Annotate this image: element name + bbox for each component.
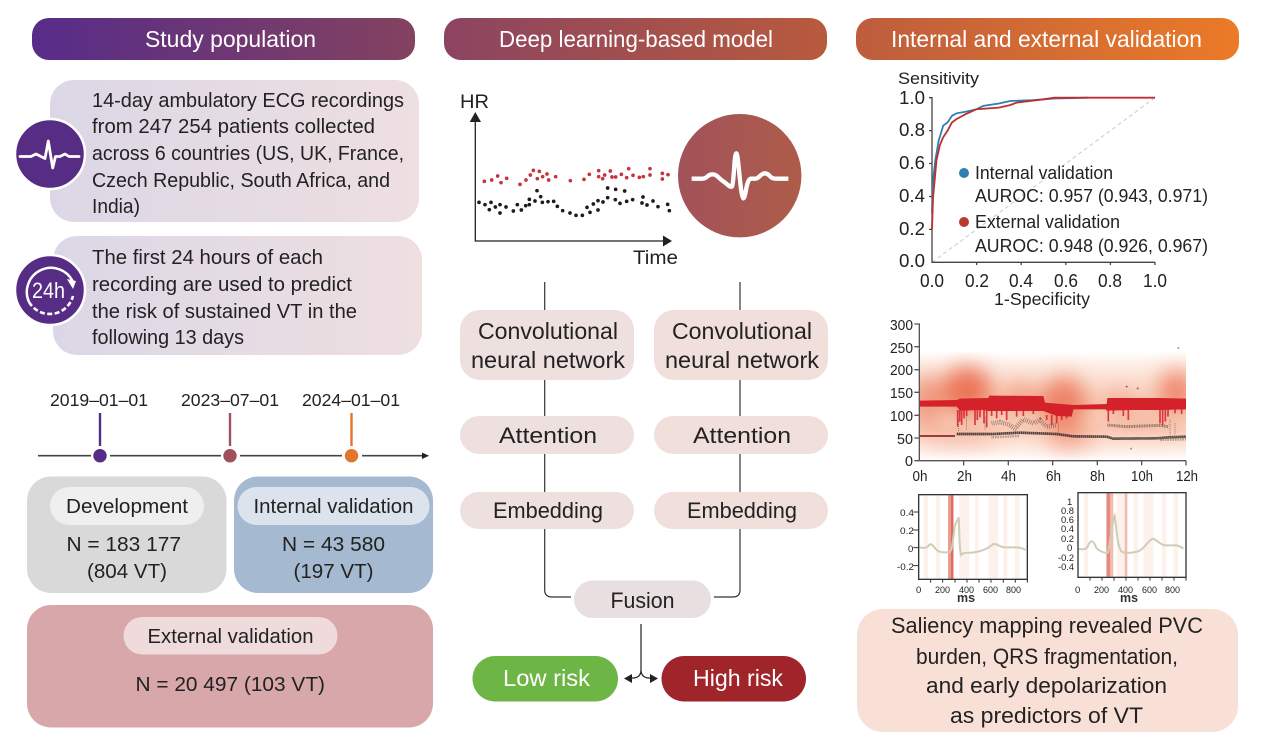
chart: heart rate saliency heatmap: 150 <box>890 386 913 402</box>
icon: large ECG circle <box>678 114 801 237</box>
pill: embedding right: Embedding <box>687 498 797 523</box>
pill: attention left: Attention <box>499 423 597 448</box>
chart: saliency ECG left: 800 <box>1006 585 1021 596</box>
chart: saliency ECG right: -0.2 <box>1058 553 1074 564</box>
chart: saliency ECG left: 200 <box>935 585 950 596</box>
panel: first 24 hours text: recording are used to predict <box>92 273 352 296</box>
legend: internal validation <box>959 163 1208 206</box>
chart: saliency ECG right: 0.8 <box>1061 506 1074 517</box>
callout: saliency mapping finding: and early depolarization <box>926 673 1167 698</box>
chart: heart rate saliency heatmap: 4h <box>1001 469 1016 485</box>
chart: heart rate saliency heatmap: 50 <box>897 432 913 448</box>
pill: attention right <box>654 416 828 454</box>
pill: fusion: Fusion <box>610 588 674 613</box>
chart: heart rate saliency heatmap: 10h <box>1131 469 1153 485</box>
panel: internal validation cohort: (197 VT) <box>294 560 374 583</box>
pill: low risk <box>472 656 618 702</box>
chart: heart rate saliency heatmap <box>890 318 1198 485</box>
icon: 24h clock circle: 24h <box>32 278 65 303</box>
chart: saliency ECG right: 0.6 <box>1061 515 1074 526</box>
heading: deep learning-based model: Deep learning-based model <box>499 26 773 52</box>
heading: study population: Study population <box>145 26 316 52</box>
pill: embedding left: Embedding <box>493 498 603 523</box>
chart: ROC curves: 0.6 <box>899 153 925 173</box>
chart: saliency ECG right: 0.4 <box>1061 524 1074 535</box>
legend: external validation: AUROC: 0.948 (0.926, 0.967) <box>975 236 1208 256</box>
date marker: 2023-07-01 <box>181 390 279 462</box>
chart: saliency ECG right: 0 <box>1067 543 1072 554</box>
chart: ROC curves: 0.0 <box>920 271 944 291</box>
chart: ROC curves <box>898 69 1208 309</box>
chart: saliency ECG left: 0.2 <box>900 526 914 537</box>
chart: ROC curves: 1.0 <box>899 88 925 108</box>
panel: first 24 hours text: The first 24 hours of each <box>92 246 323 269</box>
axis title: sensitivity: Sensitivity <box>898 69 980 88</box>
connectors: model branches <box>545 282 740 597</box>
pill: high risk: High risk <box>693 665 783 691</box>
panel: development cohort: N = 183 177 <box>66 533 181 556</box>
chart: saliency ECG left <box>897 495 1027 605</box>
callout: saliency mapping finding: burden, QRS fragmentation, <box>916 644 1178 669</box>
axis title: 1-specificity: 1-Specificity <box>994 289 1090 309</box>
panel: first 24 hours text <box>53 236 422 355</box>
chart: heart rate saliency heatmap: 100 <box>890 409 913 425</box>
timeline <box>38 390 429 462</box>
panel: ECG recordings text: Czech Republic, South Africa, and <box>92 169 390 192</box>
chart: saliency ECG right: 200 <box>1094 585 1109 596</box>
chart: saliency ECG left: 0 <box>908 544 913 555</box>
panel: internal validation cohort: N = 43 580 <box>282 533 385 556</box>
chart: heart rate saliency heatmap: 200 <box>890 363 913 379</box>
chart: saliency ECG right: 0.2 <box>1061 534 1074 545</box>
panel: external validation cohort: External validation <box>148 625 314 648</box>
heading: internal and external validation <box>856 18 1239 60</box>
chart: saliency ECG right: -0.4 <box>1058 562 1074 573</box>
chart: saliency ECG right: 800 <box>1165 585 1180 596</box>
heading: deep learning-based model <box>444 18 827 60</box>
chart: heart rate saliency heatmap: 0 <box>905 454 913 470</box>
chart: saliency ECG right: 600 <box>1142 585 1157 596</box>
panel: development cohort <box>27 476 226 593</box>
panel: development cohort: (804 VT) <box>87 560 167 583</box>
pill: attention right: Attention <box>693 423 791 448</box>
axis label: ms: ms <box>957 590 975 605</box>
chart: saliency ECG left: 0.4 <box>900 508 914 519</box>
chart: saliency ECG right <box>1058 493 1186 605</box>
pill: attention left <box>460 416 634 454</box>
chart: saliency ECG left: -0.2 <box>897 562 914 573</box>
pill: embedding right <box>654 492 828 529</box>
chart: ROC curves: 0.8 <box>1098 271 1122 291</box>
chart: ROC curves: 0.0 <box>899 251 925 271</box>
date marker: 2023-07-01: 2023–07–01 <box>181 390 279 410</box>
panel: ECG recordings text: from 247 254 patients collected <box>92 115 375 138</box>
legend: external validation <box>959 212 1208 256</box>
date marker: 2019-01-01: 2019–01–01 <box>50 390 148 410</box>
chart: heart rate saliency heatmap: 0h <box>912 469 928 485</box>
chart: saliency ECG left: 400 <box>959 585 974 596</box>
heading: internal and external validation: Internal and external validation <box>891 26 1202 52</box>
date marker: 2019-01-01 <box>50 390 148 462</box>
pill: high risk <box>662 656 806 702</box>
legend: internal validation: Internal validation <box>975 163 1113 183</box>
chart: ROC curves: 0.2 <box>899 219 925 239</box>
icon: ECG trace circle <box>15 119 85 189</box>
chart: heart rate saliency heatmap: 300 <box>890 318 913 334</box>
pill: fusion <box>574 580 711 618</box>
panel: ECG recordings text: across 6 countries (US, UK, France, <box>92 142 404 165</box>
chart: ROC curves: 1.0 <box>1143 271 1167 291</box>
chart: ROC curves: 0.8 <box>899 120 925 140</box>
panel: ECG recordings text <box>50 80 419 222</box>
chart: heart rate saliency heatmap: 8h <box>1090 469 1105 485</box>
chart: HR over time scatter: HR <box>460 92 489 113</box>
callout: saliency mapping finding <box>857 609 1238 732</box>
chart: heart rate saliency heatmap: 6h <box>1046 469 1061 485</box>
chart: saliency ECG right: 400 <box>1118 585 1133 596</box>
date marker: 2024-01-01 <box>302 390 400 462</box>
chart: heart rate saliency heatmap: 250 <box>890 341 913 357</box>
panel: external validation cohort: N = 20 497 (103 VT) <box>136 673 325 696</box>
pill: embedding left <box>460 492 634 529</box>
panel: first 24 hours text: the risk of sustained VT in the <box>92 300 357 323</box>
legend: internal validation: AUROC: 0.957 (0.943, 0.971) <box>975 186 1208 206</box>
panel: ECG recordings text: India) <box>92 195 140 218</box>
pill: CNN left: Convolutional <box>478 318 618 344</box>
panel: internal validation cohort <box>234 476 433 593</box>
chart: heart rate saliency heatmap: 2h <box>957 469 972 485</box>
chart: saliency ECG left: 600 <box>983 585 998 596</box>
pill: CNN right: neural network <box>665 347 820 373</box>
panel: internal validation cohort: Internal validation <box>254 495 414 518</box>
chart: ROC curves: 0.4 <box>1009 271 1033 291</box>
callout: saliency mapping finding: as predictors of VT <box>950 703 1143 728</box>
chart: heart rate saliency heatmap: 12h <box>1176 469 1198 485</box>
panel: first 24 hours text: following 13 days <box>92 326 244 349</box>
panel: development cohort: Development <box>66 495 188 518</box>
pill: CNN left <box>460 310 634 380</box>
chart: ROC curves: 0.2 <box>965 271 989 291</box>
chart: ROC curves: 0.4 <box>899 186 925 206</box>
chart: saliency ECG left: 0 <box>916 585 921 596</box>
chart: saliency ECG right: 0 <box>1075 585 1080 596</box>
chart: HR over time scatter <box>460 92 678 269</box>
date marker: 2024-01-01: 2024–01–01 <box>302 390 400 410</box>
panel: external validation cohort <box>27 605 433 728</box>
axis label: ms: ms <box>1120 590 1138 605</box>
chart: saliency ECG right: 1 <box>1067 497 1072 508</box>
panel: ECG recordings text: 14-day ambulatory ECG recordings <box>92 89 404 112</box>
pill: CNN right <box>654 310 828 380</box>
icon: 24h clock circle <box>15 255 85 325</box>
pill: low risk: Low risk <box>503 665 591 691</box>
callout: saliency mapping finding: Saliency mapping revealed PVC <box>891 613 1203 638</box>
pill: CNN right: Convolutional <box>672 318 812 344</box>
pill: CNN left: neural network <box>471 347 626 373</box>
chart: HR over time scatter: Time <box>633 248 678 269</box>
heading: study population <box>32 18 415 60</box>
arrow: fusion to risk outcomes <box>624 624 658 683</box>
legend: external validation: External validation <box>975 212 1120 232</box>
chart: ROC curves: 0.6 <box>1054 271 1078 291</box>
